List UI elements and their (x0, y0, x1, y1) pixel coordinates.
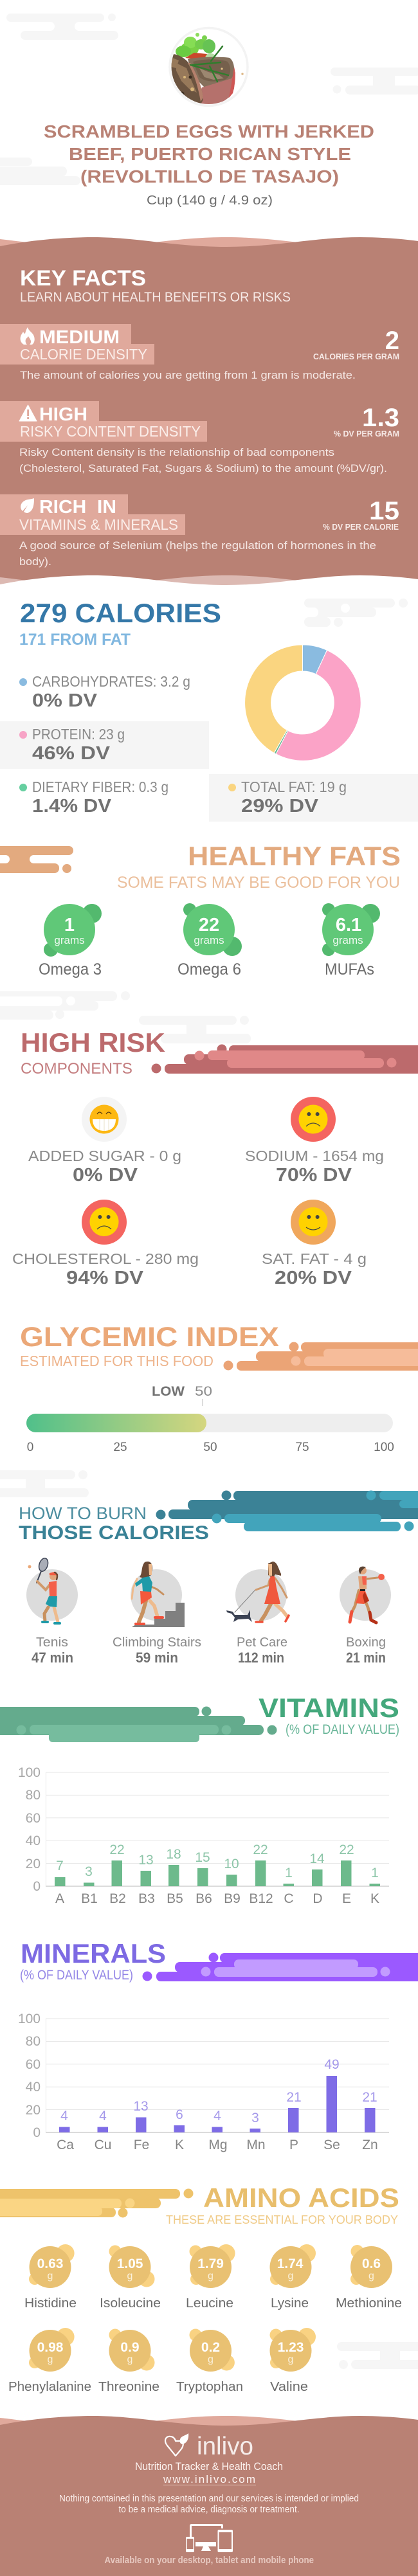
heading: high risk: COMPONENTS (21, 1060, 132, 1077)
bar chart: minerals: Se (323, 2138, 340, 2152)
fat: omega 3 (39, 904, 102, 978)
label: tennis: 47 min (32, 1650, 73, 1666)
risk: saturated fat (262, 1200, 367, 1288)
heading: vitamins (259, 1693, 399, 1737)
title (44, 122, 374, 186)
label: medium: MEDIUM (39, 327, 120, 348)
fat: MUFAs (322, 903, 380, 978)
logo: inlivo: inlivo (197, 2433, 253, 2460)
amino: valine: Valine (270, 2380, 308, 2394)
bar chart: vitamins: 80 (26, 1788, 41, 1803)
amino: threonine (98, 2328, 159, 2394)
panel: key facts (0, 237, 418, 595)
amino: valine (270, 2328, 316, 2394)
heading: healthy fats: SOME FATS MAY BE GOOD FOR YOU (117, 874, 400, 892)
amino: isoleucine: Isoleucine (100, 2296, 161, 2310)
website link: www.inlivo.com (163, 2473, 255, 2485)
fat: omega 3: 1 (64, 915, 75, 935)
decorative cloud: header left (0, 158, 80, 185)
risk: added sugar: 0% DV (73, 1165, 138, 1185)
heading: minerals: (% OF DAILY VALUE) (20, 1968, 133, 1983)
bar chart: vitamins: 0 (33, 1879, 41, 1894)
decorative cloud: faint left (0, 991, 130, 1020)
label: pet care: 112 min (238, 1650, 284, 1666)
amino: lysine: g (288, 2271, 293, 2282)
icon: devices (186, 2524, 233, 2552)
fact: risky content density: RISKY CONTENT DENSITY (20, 423, 201, 440)
amino: isoleucine: g (127, 2271, 132, 2282)
amino: phenylalanine: Phenylalanine (8, 2380, 91, 2394)
decorative cloud: burn faint (0, 1470, 89, 1497)
amino: phenylalanine (8, 2328, 91, 2394)
activity: boxing (340, 1567, 391, 1666)
amino: histidine: g (48, 2271, 53, 2282)
bar chart: minerals: 6 (176, 2107, 183, 2122)
heading: vitamins: (% OF DAILY VALUE) (286, 1722, 399, 1737)
heading: minerals (20, 1938, 166, 1983)
serving size: Cup (140 g / 4.9 oz) (147, 194, 273, 208)
amino: valine: 1.23 (278, 2340, 304, 2355)
description: body). (19, 556, 51, 568)
fat: MUFAs: grams (332, 934, 363, 946)
amino: threonine: 0.9 (120, 2340, 140, 2355)
bar chart: minerals: 100 (18, 2012, 41, 2026)
bar chart: minerals: P (289, 2138, 298, 2152)
description (19, 447, 387, 474)
label: tennis (32, 1635, 73, 1666)
heading: amino acids: AMINO ACIDS (203, 2183, 399, 2213)
amino: lysine (270, 2244, 316, 2310)
macro: protein (19, 726, 125, 764)
heading: high risk: HIGH RISK (21, 1027, 165, 1058)
value: 1.3 percent DV per gram: % DV PER GRAM (334, 429, 399, 438)
bar chart: vitamins: 1 (285, 1866, 293, 1880)
heading: healthy fats (117, 841, 401, 892)
bar chart: vitamins: B12 (249, 1891, 273, 1906)
decorative cloud: calories (299, 599, 408, 627)
bar chart: minerals: Mg (208, 2138, 228, 2152)
disclaimer: Nothing contained in this presentation and our services is intended or implied (59, 2494, 359, 2504)
macro: protein: PROTEIN: 23 g (32, 726, 125, 743)
fat: MUFAs: 6.1 (336, 915, 361, 935)
label: high: HIGH (39, 404, 87, 425)
gauge scale (27, 1441, 394, 1454)
decorative cloud: header top left (6, 14, 132, 40)
risk: sodium: 70% DV (276, 1165, 352, 1185)
macro: dietary fiber: 1.4% DV (32, 796, 112, 816)
bar chart: vitamins: B1 (81, 1891, 98, 1906)
disclaimer: to be a medical advice, diagnosis or treatment. (118, 2505, 300, 2515)
bar chart: vitamins: 22 (109, 1842, 125, 1857)
heading: calories: 279 CALORIES (20, 598, 221, 628)
logo: inlivo (165, 2433, 253, 2460)
fact: calorie density: CALORIE DENSITY (20, 346, 147, 363)
subheading: LEARN ABOUT HEALTH BENEFITS OR RISKS (20, 290, 291, 305)
bar chart: minerals: Zn (362, 2138, 378, 2152)
bar chart: minerals: 13 (133, 2099, 149, 2114)
amino: lysine: 1.74 (277, 2256, 304, 2271)
decorative cloud: high risk (152, 1044, 418, 1074)
decorative cloud: faint centre (139, 1016, 251, 1043)
fact: rich in vitamins and minerals (0, 494, 399, 568)
risk: sodium (245, 1097, 384, 1185)
bar chart: vitamins: 13 (138, 1853, 154, 1868)
bar chart: minerals: Mn (246, 2138, 266, 2152)
bar chart: minerals: Fe (134, 2138, 149, 2152)
macro: carbohydrates (19, 673, 190, 711)
title: BEEF, PUERTO RICAN STYLE (69, 144, 351, 164)
amino: isoleucine (100, 2245, 161, 2310)
heading: key facts: KEY FACTS (20, 266, 146, 291)
heading: calories (19, 598, 221, 649)
amino: methionine: 0.6 (362, 2256, 381, 2271)
bar chart: vitamins: 22 (253, 1842, 268, 1857)
activity: tennis (26, 1557, 78, 1666)
gauge scale: 75 (295, 1441, 309, 1454)
decorative cloud: amino acids (0, 2188, 193, 2218)
value: 2 calories per gram: 2 (385, 327, 399, 355)
activity: pet care (226, 1562, 289, 1666)
bar chart: vitamins: B5 (167, 1891, 183, 1906)
heading: amino acids (166, 2183, 399, 2226)
decorative cloud: amino faint (337, 2342, 418, 2369)
label: climbing stairs (113, 1635, 201, 1666)
label: boxing: Boxing (346, 1635, 386, 1650)
bar chart: vitamins: 20 (26, 1857, 41, 1871)
title: SCRAMBLED EGGS WITH JERKED (44, 122, 374, 141)
amino: isoleucine: 1.05 (117, 2256, 143, 2271)
amino: phenylalanine: g (48, 2354, 53, 2365)
bar chart: minerals: 0 (33, 2125, 41, 2140)
bar chart: minerals: 49 (324, 2057, 340, 2072)
bar chart: minerals: 4 (60, 2109, 68, 2123)
decorative cloud: burn (156, 1490, 418, 1531)
label: climbing stairs: Climbing Stairs (113, 1635, 201, 1650)
fat: omega 3: grams (54, 934, 85, 946)
heading: minerals: MINERALS (21, 1938, 166, 1968)
risk: saturated fat: 20% DV (275, 1268, 352, 1288)
bar chart: vitamins: 7 (56, 1859, 64, 1873)
panel: footer (0, 2416, 418, 2576)
risk: saturated fat: SAT. FAT - 4 g (262, 1250, 367, 1267)
decorative cloud: glycemic (224, 1342, 418, 1371)
icon: flame (21, 327, 35, 345)
amino: threonine: g (127, 2354, 132, 2365)
heading: glycemic index: ESTIMATED FOR THIS FOOD (20, 1353, 214, 1369)
bar chart: vitamins: 22 (339, 1842, 354, 1857)
activity: climbing stairs (113, 1562, 201, 1666)
bar chart: vitamins: D (313, 1891, 323, 1906)
risk: added sugar (28, 1097, 181, 1185)
bar chart: minerals: 4 (99, 2109, 107, 2123)
icon: tennis player (28, 1557, 60, 1623)
bar chart: vitamins: 14 (309, 1851, 325, 1866)
gauge scale: 25 (113, 1441, 127, 1454)
bar chart: minerals: 21 (286, 2090, 302, 2105)
bar chart: vitamins: K (370, 1891, 379, 1906)
bar chart: vitamins: 3 (85, 1864, 93, 1879)
amino: methionine: Methionine (336, 2296, 402, 2310)
risk: cholesterol: 94% DV (66, 1268, 144, 1288)
bar chart: vitamins: A (55, 1891, 64, 1906)
fat: omega 6: Omega 6 (177, 960, 241, 978)
bar chart: minerals: 20 (26, 2103, 41, 2118)
bar chart: vitamins: 1 (371, 1866, 379, 1880)
risk: cholesterol (12, 1200, 199, 1288)
bar chart: vitamins: B6 (195, 1891, 212, 1906)
icon: woman climbing stairs (132, 1562, 185, 1627)
bar chart: vitamins: 100 (18, 1765, 41, 1780)
description: The amount of calories you are getting from 1 gram is moderate. (20, 370, 356, 381)
value: 15 percent DV per calorie: 15 (369, 497, 399, 525)
decorative cloud: minerals (143, 1953, 418, 1981)
macro: total fat (228, 779, 347, 816)
bar chart: vitamins: E (342, 1891, 351, 1906)
amino: tryptophan: 0.2 (201, 2340, 220, 2355)
decorative cloud: header right (331, 68, 418, 95)
bar chart: minerals: 3 (251, 2111, 259, 2125)
value: 15 percent DV per calorie: % DV PER CALORIE (323, 522, 399, 532)
bar chart: minerals: 4 (214, 2109, 221, 2123)
bar chart: minerals (18, 2012, 389, 2152)
label: tennis: Tenis (36, 1635, 68, 1650)
amino: methionine: g (368, 2271, 374, 2282)
tagline: Nutrition Tracker & Health Coach (135, 2460, 283, 2472)
risk: cholesterol: CHOLESTEROL - 280 mg (12, 1250, 199, 1267)
icon: boxer (350, 1567, 385, 1623)
description (19, 540, 376, 568)
description: Risky Content density is the relationship of bad components (19, 447, 334, 458)
amino: leucine: g (208, 2271, 214, 2282)
label: rich in: RICH IN (39, 497, 116, 518)
heading: amino acids: THESE ARE ESSENTIAL FOR YOUR BODY (166, 2213, 398, 2226)
label: climbing stairs: 59 min (136, 1650, 178, 1666)
gauge scale: 100 (374, 1441, 394, 1454)
fat: omega 6: 22 (199, 915, 219, 935)
bar chart: minerals: 40 (26, 2080, 41, 2094)
amino: histidine (24, 2244, 77, 2310)
macro: carbohydrates: 0% DV (32, 690, 98, 711)
bar chart: vitamins: 60 (26, 1811, 41, 1826)
description: A good source of Selenium (helps the regulation of hormones in the (19, 540, 376, 552)
amino: leucine: 1.79 (197, 2256, 224, 2271)
bar chart: minerals: K (175, 2138, 184, 2152)
glycemic value: LOW (152, 1384, 185, 1399)
heading: glycemic index (20, 1322, 279, 1369)
label: pet care (237, 1635, 287, 1666)
icon: woman walking dog (226, 1562, 289, 1622)
icon: leaf (21, 498, 34, 513)
amino: threonine: Threonine (98, 2380, 159, 2394)
value: 2 calories per gram (313, 327, 399, 361)
risk: sodium: SODIUM - 1654 mg (245, 1148, 384, 1164)
label: pet care: Pet Care (237, 1635, 287, 1650)
bar chart: vitamins: 18 (166, 1847, 181, 1862)
value: 1.3 percent DV per gram (334, 404, 399, 438)
food photo: steak in round frame (168, 28, 248, 106)
bar chart: vitamins: B3 (138, 1891, 155, 1906)
gauge scale: 0 (27, 1441, 33, 1454)
macro: carbohydrates: CARBOHYDRATES: 3.2 g (32, 673, 190, 690)
bar chart: vitamins: 10 (224, 1857, 239, 1871)
bar chart: minerals: 21 (362, 2090, 377, 2105)
heading: high risk (21, 1027, 165, 1077)
glycemic value: 50 (195, 1384, 212, 1399)
icon: warning triangle (19, 405, 37, 421)
amino: leucine (186, 2244, 235, 2310)
amino: phenylalanine: 0.98 (37, 2340, 64, 2355)
disclaimer (59, 2494, 359, 2515)
amino: valine: g (288, 2354, 293, 2365)
macro: dietary fiber (19, 779, 168, 816)
value: 1.3 percent DV per gram: 1.3 (362, 404, 399, 432)
bar chart: vitamins: 40 (26, 1833, 41, 1848)
amino: tryptophan (176, 2328, 243, 2394)
bar chart: minerals: 60 (26, 2057, 41, 2072)
bar chart: minerals: Ca (57, 2138, 74, 2152)
macro: total fat: 29% DV (241, 796, 319, 816)
decorative cloud: healthy fats (0, 846, 73, 873)
heading: glycemic index: GLYCEMIC INDEX (20, 1322, 279, 1353)
amino: tryptophan: g (208, 2354, 214, 2365)
fact: rich in vitamins and minerals: VITAMINS & MINERALS (19, 516, 178, 533)
bar chart: vitamins: C (284, 1891, 294, 1906)
amino: histidine: Histidine (24, 2296, 77, 2310)
fat: MUFAs: MUFAs (325, 960, 374, 978)
amino: methionine (336, 2245, 402, 2310)
macro: dietary fiber: DIETARY FIBER: 0.3 g (32, 779, 168, 795)
title: (REVOLTILLO DE TASAJO) (80, 167, 339, 186)
bar chart: minerals: Cu (95, 2138, 111, 2152)
glycemic gauge bar (26, 1414, 393, 1432)
heading: calories: 171 FROM FAT (19, 631, 131, 649)
label: boxing: 21 min (346, 1650, 386, 1666)
macro: total fat: TOTAL FAT: 19 g (241, 779, 347, 795)
fact: calorie density (0, 324, 399, 381)
macro: protein: 46% DV (32, 743, 111, 764)
gauge scale: 50 (203, 1441, 217, 1454)
fact: risky content density (0, 401, 399, 474)
value: 15 percent DV per calorie (323, 497, 399, 532)
risk: added sugar: ADDED SUGAR - 0 g (28, 1148, 181, 1164)
value: 2 calories per gram: CALORIES PER GRAM (313, 352, 399, 361)
bar chart: vitamins: B2 (109, 1891, 126, 1906)
glycemic value (152, 1384, 212, 1406)
label: boxing (346, 1635, 386, 1666)
fat: omega 6 (177, 903, 242, 978)
heading: vitamins: VITAMINS (259, 1693, 399, 1723)
amino: tryptophan: Tryptophan (176, 2380, 243, 2394)
bar chart: vitamins: 15 (195, 1850, 210, 1865)
amino: leucine: Leucine (186, 2296, 233, 2310)
fat: omega 6: grams (194, 934, 224, 946)
heading: how to burn: HOW TO BURN (19, 1504, 147, 1523)
bar chart: minerals: 80 (26, 2034, 41, 2049)
macro rows background (0, 721, 418, 822)
amino: lysine: Lysine (271, 2296, 309, 2310)
heading: healthy fats: HEALTHY FATS (188, 841, 401, 871)
availability note: Available on your desktop, tablet and mobile phone (104, 2555, 314, 2566)
decorative cloud: vitamins (0, 1706, 277, 1742)
bar chart: vitamins (18, 1765, 389, 1906)
description: (Cholesterol, Saturated Fat, Sugars & Sodium) to the amount (%DV/gr). (19, 463, 387, 474)
heading: how to burn: THOSE CALORIES (19, 1522, 209, 1544)
fat: omega 3: Omega 3 (39, 960, 102, 978)
donut chart: macronutrients (245, 645, 361, 761)
bar chart: vitamins: B9 (224, 1891, 241, 1906)
heading: how to burn (19, 1504, 209, 1544)
amino: histidine: 0.63 (37, 2256, 63, 2271)
